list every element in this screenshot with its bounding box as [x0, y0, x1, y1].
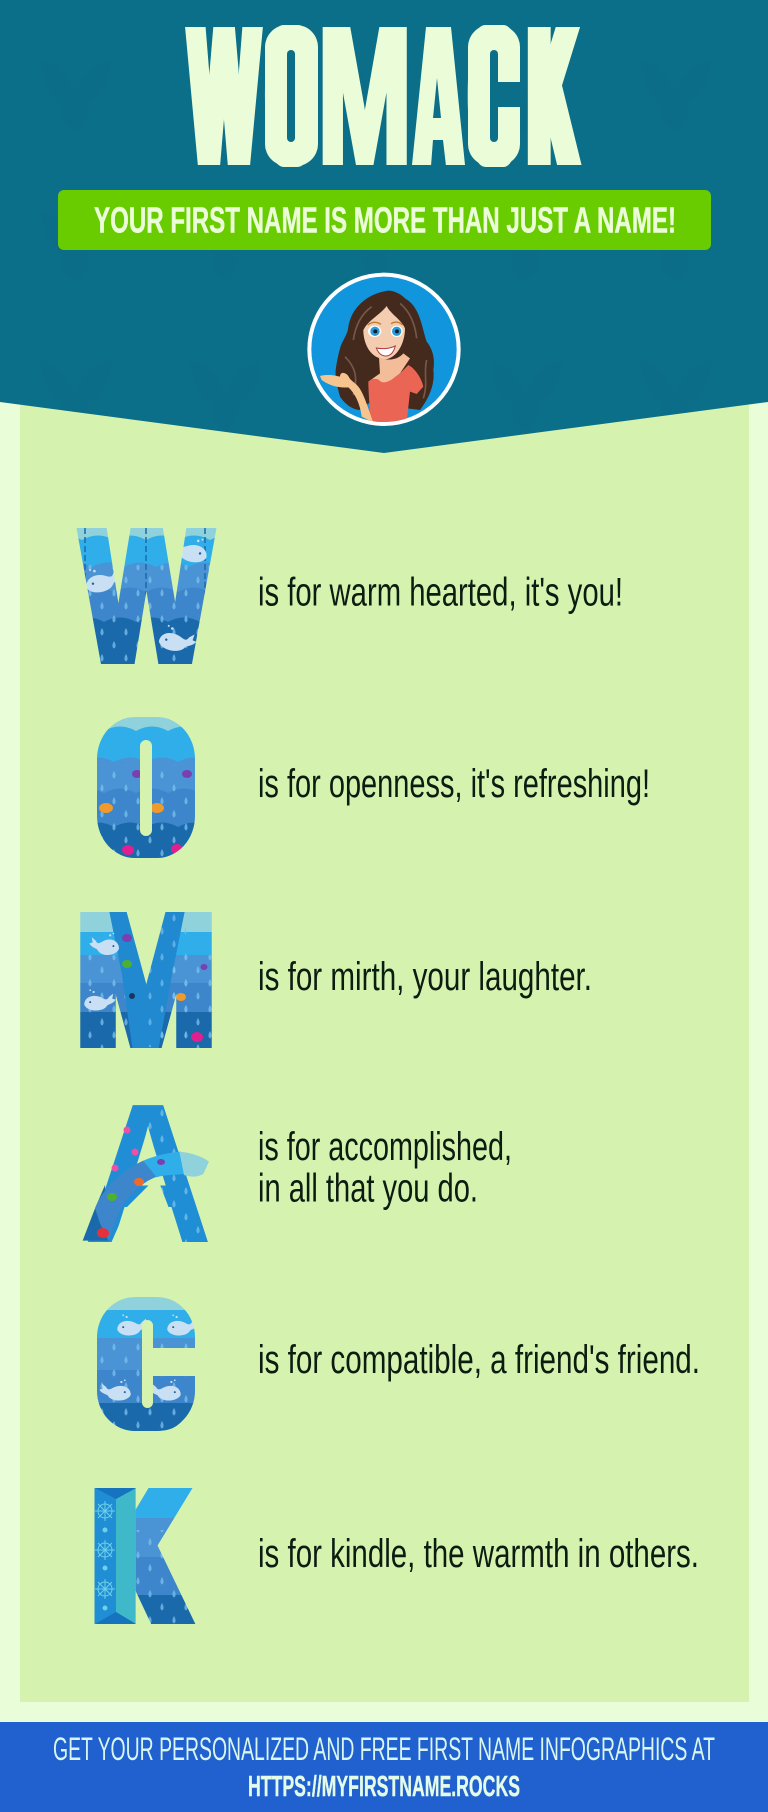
- letter W illustration: [76, 528, 216, 664]
- footer: [0, 1722, 768, 1812]
- header: teal chevron: [0, 0, 768, 453]
- panel: light green content area: [20, 380, 749, 1702]
- letter A illustration: [82, 1105, 209, 1242]
- text: M line: is for mirth, your laughter.: [258, 955, 592, 999]
- footer: HTTPS://MYFIRSTNAME.ROCKS: [248, 1771, 520, 1803]
- letter M illustration: [80, 912, 212, 1048]
- banner: [58, 190, 711, 250]
- title: [190, 0, 575, 209]
- letter C illustration: [97, 1297, 195, 1431]
- text: A lines: in all that you do.: [258, 1167, 478, 1211]
- letter O illustration: [97, 717, 195, 858]
- text: A lines: [258, 1125, 512, 1211]
- text: W line: is for warm hearted, it's you!: [258, 571, 623, 615]
- text: A lines: is for accomplished,: [258, 1125, 512, 1169]
- avatar: woman in a circle: [307, 273, 461, 426]
- letter K illustration: [94, 1488, 196, 1624]
